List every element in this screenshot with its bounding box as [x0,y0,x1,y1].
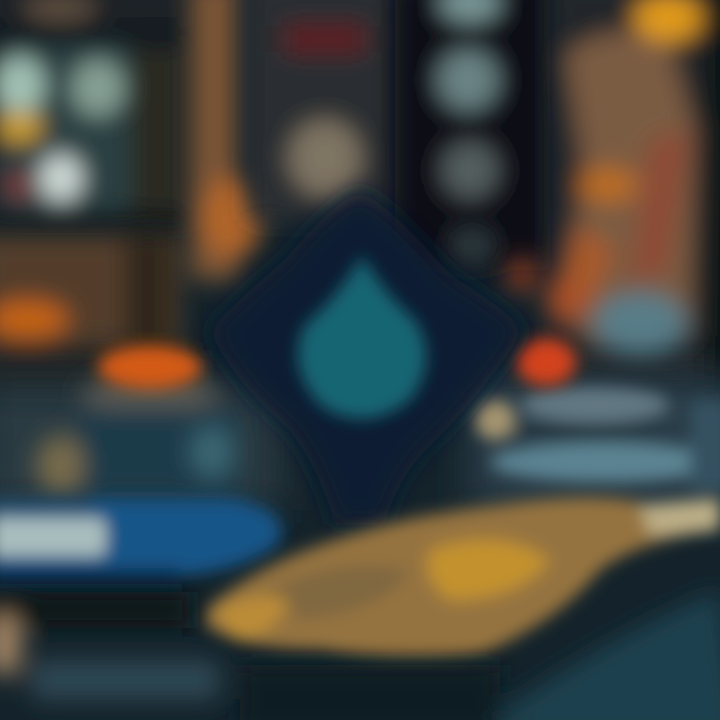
panel: table dark mid band [0,380,720,510]
panel: left blue plate [0,498,282,588]
panel: wooden column [190,0,262,280]
panel: top left shelves [0,0,190,232]
panel: right colourful column [506,0,720,380]
icon: red sphere [516,338,576,386]
panel: right stacked plates [475,387,720,490]
panel: left lower shelf [0,230,200,390]
panel: gold leaf [205,498,720,659]
icon: teal drop [298,255,426,419]
icon: navy diamond with water drop [208,190,525,525]
panel: left bowl stack [36,376,240,496]
panel: centre dark wall [248,0,398,220]
panel: bottom table [0,590,720,720]
panel: dark film strip [395,0,550,270]
icon: orange mound [98,345,202,389]
